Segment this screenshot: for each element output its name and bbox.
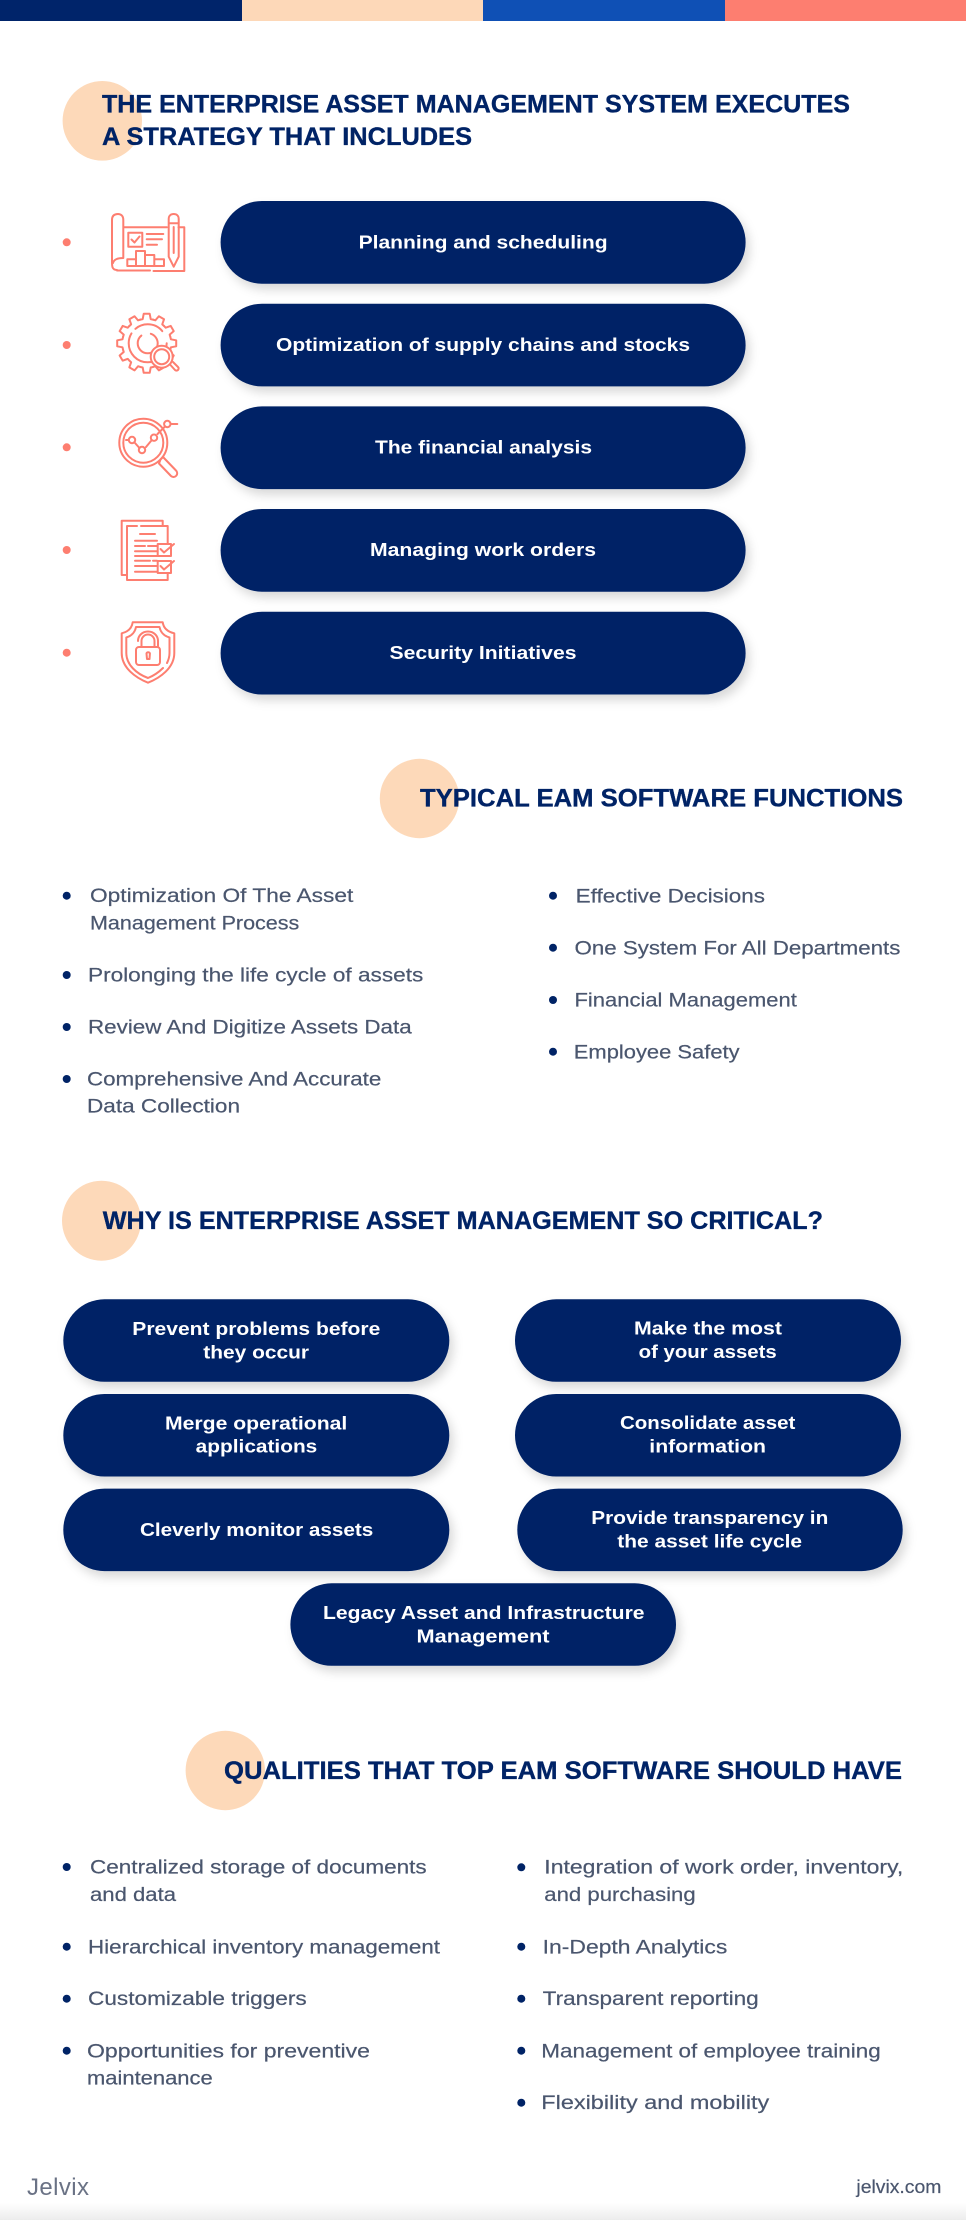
list: functions left column: Comprehensive And Accurate — [87, 1069, 381, 1090]
pill: prevent problems — [63, 1299, 449, 1382]
pill: transparency — [517, 1489, 903, 1571]
footer url: jelvix.com — [855, 2177, 941, 2197]
list: functions left column: Prolonging the life cycle of assets — [88, 965, 423, 986]
list: functions right column: One System For All Departments — [574, 938, 900, 959]
logo: Jelvix: Jelvix — [27, 2174, 89, 2201]
list: qualities right column: Transparent reporting — [543, 1989, 759, 2010]
list: functions left column — [63, 886, 423, 1118]
pill: consolidate: information — [649, 1436, 766, 1456]
heading: why critical: WHY IS ENTERPRISE ASSET MANAGEMENT SO CRITICAL? — [103, 1207, 823, 1235]
row: security — [63, 612, 746, 694]
list: functions right column: Financial Management — [574, 990, 798, 1011]
pill: consolidate — [515, 1394, 901, 1476]
list: qualities right column: Integration of work order, inventory, — [544, 1858, 903, 1879]
pill: security: Security Initiatives — [390, 643, 576, 663]
pill: legacy: Management — [416, 1626, 550, 1646]
pill: legacy — [290, 1583, 676, 1666]
pill: security — [221, 612, 746, 694]
pill: transparency: Provide transparency in — [591, 1508, 828, 1528]
pill: planning — [221, 201, 746, 284]
pill: merge applications: Merge operational — [165, 1413, 347, 1433]
list: qualities right column: and purchasing — [544, 1885, 696, 1906]
pill: prevent problems: they occur — [203, 1342, 309, 1362]
panel: why critical pills — [63, 1299, 903, 1666]
list: qualities right column: In-Depth Analytics — [543, 1937, 727, 1958]
pill: legacy: Legacy Asset and Infrastructure — [323, 1603, 644, 1623]
pill: prevent problems: Prevent problems before — [132, 1319, 380, 1339]
panel: strategy rows — [63, 201, 746, 694]
list: functions right column: Employee Safety — [574, 1042, 740, 1063]
list: functions left column: Optimization Of The Asset — [90, 886, 354, 907]
row: planning and scheduling — [63, 201, 746, 284]
list: qualities right column — [517, 1858, 903, 2114]
list: qualities left column — [63, 1858, 441, 2090]
heading: why critical — [62, 1181, 823, 1261]
pill: monitor: Cleverly monitor assets — [140, 1520, 373, 1540]
list: qualities left column: Customizable triggers — [88, 1989, 307, 2010]
row: supply chains — [63, 304, 746, 386]
pill: transparency: the asset life cycle — [617, 1531, 802, 1551]
list: functions left column: Management Process — [90, 913, 299, 934]
list: qualities left column: Hierarchical inventory management — [88, 1937, 441, 1958]
icon: blueprint and pencil — [112, 214, 184, 271]
pill: financial analysis — [221, 406, 746, 489]
heading: strategy: A STRATEGY THAT INCLUDES — [102, 123, 472, 151]
pill: optimization — [221, 304, 746, 386]
list: functions right column: Effective Decisions — [576, 886, 765, 907]
pill: make the most: Make the most — [634, 1318, 782, 1338]
pill: financial analysis: The financial analysis — [375, 438, 592, 458]
pill: work orders: Managing work orders — [370, 540, 596, 560]
icon: magnifier with graph — [119, 419, 177, 477]
pill: make the most: of your assets — [639, 1342, 777, 1362]
heading: qualities: QUALITIES THAT TOP EAM SOFTWARE SHOULD HAVE — [224, 1757, 902, 1785]
footer fade — [0, 2203, 966, 2220]
list: qualities left column: maintenance — [87, 2069, 213, 2090]
row: financial analysis — [63, 406, 746, 489]
list: qualities left column: Opportunities for preventive — [87, 2041, 370, 2062]
icon: documents with checks — [122, 521, 174, 580]
pill: make the most — [515, 1299, 901, 1382]
pill: consolidate: Consolidate asset — [620, 1413, 795, 1433]
list: qualities left column: Centralized storage of documents — [90, 1858, 427, 1879]
heading: typical functions: TYPICAL EAM SOFTWARE FUNCTIONS — [420, 785, 903, 813]
list: functions right column — [549, 886, 900, 1063]
pill: planning: Planning and scheduling — [359, 232, 608, 252]
pill: monitor — [63, 1489, 449, 1571]
list: qualities right column: Management of employee training — [541, 2041, 881, 2062]
top colour bar — [0, 0, 966, 21]
icon: shield and lock — [122, 622, 174, 683]
pill: merge applications: applications — [196, 1437, 317, 1457]
pill: merge applications — [63, 1394, 449, 1476]
list: qualities left column: and data — [90, 1885, 176, 1906]
row: work orders — [63, 509, 746, 592]
pill: optimization: Optimization of supply chains and stocks — [276, 335, 690, 355]
heading: strategy: THE ENTERPRISE ASSET MANAGEMENT SYSTEM EXECUTES — [102, 90, 850, 118]
heading: strategy — [63, 81, 850, 161]
list: functions left column: Data Collection — [87, 1097, 240, 1118]
list: functions left column: Review And Digitize Assets Data — [88, 1017, 412, 1038]
list: qualities right column: Flexibility and mobility — [541, 2093, 770, 2114]
heading: typical functions — [380, 759, 903, 838]
pill: work orders — [221, 509, 746, 592]
heading: qualities — [186, 1731, 902, 1810]
icon: gear with magnifier — [117, 314, 179, 373]
